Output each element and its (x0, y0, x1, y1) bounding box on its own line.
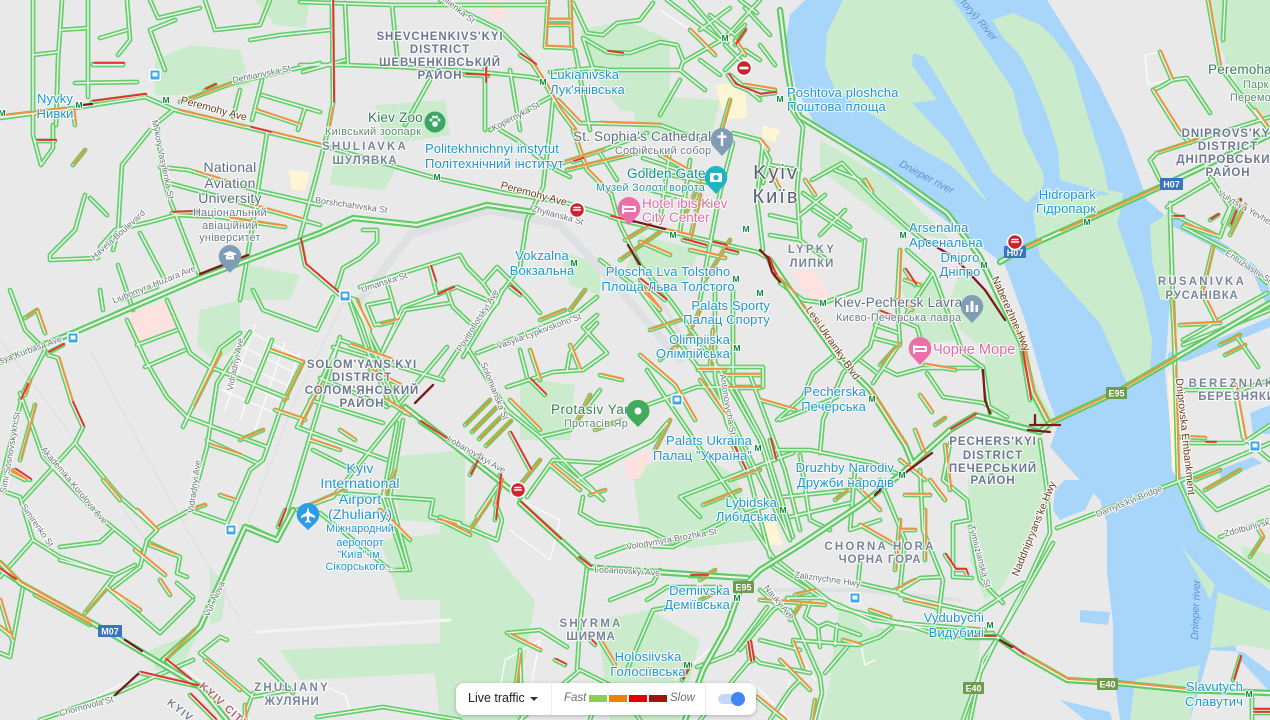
metro markers: M (1083, 217, 1091, 227)
points of interest (193, 62, 1270, 430)
road and river names: Peremohy Ave (179, 94, 248, 124)
label: aviation university Ukrainian: авіаційний (202, 220, 258, 232)
label: Arsenalna station: Арсенальна (909, 235, 983, 250)
metro markers: M (721, 33, 729, 43)
label: Arsenalna station: Arsenalna (909, 220, 968, 235)
label: Lypky: LYPKY (788, 244, 836, 256)
label: Peremoha park Ukrainian: Парк (1243, 79, 1269, 91)
label: National Aviation University: National (204, 159, 256, 175)
label: Poshtova ploshcha station: Poshtova ploshcha (787, 85, 899, 100)
label: Lybidska station: Lybidska (725, 495, 777, 510)
railway yards and airport runway (0, 210, 960, 632)
metro markers: M (980, 260, 988, 270)
label: Kyiv zoo Ukrainian: Київський зоопарк (325, 126, 421, 138)
label: Shevchenkivskyi district: ШЕВЧЕНКІВСЬКИЙ (379, 56, 501, 69)
label: Vokzalna station: Vokzalna (515, 248, 569, 263)
road and river names: Simirenko St (19, 502, 56, 549)
Fast label: Fast (564, 692, 586, 704)
shield: M07 (98, 625, 122, 637)
label: Ploshcha Lva Tolstoho station: Ploscha Lva Tolstoho (606, 264, 730, 279)
label: Demiivska station: Demiivska (669, 583, 730, 598)
label: Shyrma: ШИРМА (566, 631, 616, 643)
label: Rusanivka: РУСАНІВКА (1165, 290, 1239, 302)
icon: Protasiv Yar pin (627, 400, 649, 427)
metro markers: M (754, 443, 762, 453)
label: Palats Sporty station: Палац Спорту (683, 312, 770, 327)
label: Lukianivska station: Lukianivska (550, 67, 619, 82)
divider left (551, 683, 552, 715)
label: Zhuliany: ЖУЛЯНИ (263, 696, 320, 708)
metro markers: M (819, 298, 827, 308)
label: Dnipro station: Дніпро (940, 264, 980, 279)
metro markers: M (683, 660, 691, 670)
metro markers: M (733, 593, 741, 603)
label: Shuliavka: ШУЛЯВКА (332, 155, 398, 167)
label: Shevchenkivskyi district: SHEVCHENKIVS'KYI (376, 31, 504, 43)
metro markers: M (776, 94, 784, 104)
metro markers: M (742, 224, 750, 234)
label: Vokzalna station: Вокзальна (510, 263, 575, 278)
dropdown caret (530, 697, 538, 701)
metro markers: M (899, 230, 907, 240)
metro markers: M (1245, 689, 1253, 699)
road and river names: Mykoly Vasylenka St (150, 119, 176, 200)
road and river names: Dehtiarivska St (231, 63, 292, 85)
icon: road closed (736, 60, 752, 76)
metro markers: M (539, 77, 547, 87)
label: Golden Gate: Golden Gate (627, 166, 706, 181)
Slow label: Slow (670, 692, 695, 704)
metro markers: M (756, 288, 764, 298)
label: Olimpiiska station: Olimpiiska (669, 332, 730, 347)
shield: H07 on bridge (1004, 246, 1026, 258)
metro markers: M (986, 620, 994, 630)
label: National Aviation University: University (198, 190, 262, 206)
label: Pecherskyi district: PECHERS'KYI (949, 436, 1037, 448)
label: Zhuliany: ZHULIANY (254, 682, 330, 694)
label: Pecherskyi district: ПЕЧЕРСЬКИЙ (949, 462, 1037, 475)
label: Vydubychi station: Видубичі (929, 625, 984, 640)
icon: traffic incident Lobanovskyi (510, 482, 526, 498)
label: Holosiivska station: Holosiivska (615, 649, 681, 664)
label: airport Ukrainian name: Сікорського... (325, 561, 395, 573)
road and river names: Lobanovskyi Ave (594, 564, 660, 578)
road and river names: Vasylia Lypkivskoho St (495, 311, 583, 351)
label: Slavutych station: Славутич (1185, 694, 1243, 709)
shield: E40 east (1097, 678, 1118, 690)
metro markers: M (669, 230, 677, 240)
icon: St Sophia pin (711, 128, 733, 156)
label: aviation university Ukrainian: університет (199, 232, 261, 244)
metro markers: M (868, 394, 876, 404)
pink and yellow land-use areas (128, 0, 1178, 545)
label: Kyievo Pecherska Lavra Ukrainian: Києво-Печерська лавра (836, 312, 961, 324)
label: Solomianskyi district: DISTRICT (332, 372, 392, 384)
label: Dniprovskyi district: РАЙОН (1206, 166, 1250, 179)
road and river names: Liubomyra Huzara Ave (111, 263, 197, 305)
highway shields (98, 178, 1183, 694)
label: Pecherska station: Pecherska (804, 384, 866, 399)
label: Kyiv International Airport: Kyiv (346, 461, 374, 477)
icon: Airport pin (297, 503, 319, 530)
label: Dnipro station: Dnipro (941, 250, 979, 265)
label: Sofiiskyi sobor: Софійський собор (615, 145, 711, 157)
scale: dark red colour (649, 695, 667, 702)
label: Vydubychi station: Vydubychi (924, 610, 984, 625)
legend: live traffic control (456, 683, 756, 715)
label: Hidropark station: Hidropark (1039, 187, 1096, 202)
label: Rusanivka: RUSANIVKA (1158, 276, 1246, 288)
label: Lypky: ЛИПКИ (790, 258, 834, 270)
shield: H07 (1160, 178, 1183, 190)
road and river names: Dnieper river (897, 158, 956, 197)
label: Slavutych station: Slavutych (1186, 679, 1243, 694)
shield: E95 centre: E95 (735, 582, 752, 592)
label: Ploshcha Lva Tolstoho station: Площа Льва Толстого (601, 279, 735, 294)
label: Shuliavka: SHULIAVKA (322, 141, 408, 153)
shield: E95 east: E95 (1108, 388, 1125, 398)
road and river names: Zaliznychne Hwy (794, 569, 862, 589)
road and river names: Tymiuzianska St (967, 524, 993, 589)
label: Shyrma: SHYRMA (559, 618, 623, 630)
road and river names: Dniprovska Embankment (1173, 378, 1197, 496)
label: Holosiivska station: Голосіївська (610, 664, 686, 679)
scale: fast colour (589, 695, 607, 702)
label: Druzhby Narodiv station: Дружби народів (797, 475, 894, 490)
road and river names: Vul. Nova (202, 579, 227, 618)
dark red stopped traffic segments (82, 104, 1060, 695)
label: Olimpiiska station: Олімпійська (656, 346, 731, 361)
shield: E40 west (963, 682, 984, 694)
label: Nyvky station: Нивки (36, 106, 74, 121)
road and river names: Nauky Ave (762, 583, 797, 621)
label: Protasiv Yar: Protasiv Yar (551, 402, 629, 417)
label: Kyiv city name: Kyiv (753, 162, 799, 184)
label: Zoloti Vorota museum: Музей Золоті ворота (596, 182, 705, 194)
label: Protasiv Yar Ukrainian: Протасів Яр (564, 418, 628, 430)
road and river names: Vidradnyi Ave (185, 459, 203, 514)
scale: orange colour (609, 695, 627, 702)
shield: M07: M07 (101, 626, 119, 636)
road and river names: Akademika Korolova Ave (39, 444, 110, 526)
icon: traffic incident Peremohy (570, 202, 584, 218)
label: airport Ukrainian name: аеропорт (336, 537, 384, 549)
scale: red colour (629, 695, 647, 702)
label: airport Ukrainian name: "Київ" ім. (337, 549, 383, 561)
road and river names: Havela Boulevard (89, 208, 147, 262)
label: Poshtova ploshcha station: Поштова площа (787, 99, 887, 114)
icon: Hotel ibis pin (618, 197, 640, 225)
icon: traffic incident H07 (1008, 234, 1022, 250)
label: Nyvky station: Nyvky (37, 91, 73, 106)
label: Palats Ukraina station: Палац "Україна" (653, 448, 752, 463)
road and river names: Povitroflotskyi Ave (454, 287, 501, 353)
label: Chorne More hotel: Чорне Море (933, 342, 1015, 358)
label: Politekhnichnyi instytut station: Політехнічний інститут (425, 156, 564, 171)
road and river names: Zhylianska St (531, 203, 585, 227)
road and river names: Kopernyka St (490, 99, 542, 133)
label: Hotel ibis: Hotel ibis Kiev (642, 196, 728, 211)
label: Dniprovskyi district: DISTRICT (1198, 141, 1258, 153)
road and river names: Chornovola St (58, 694, 115, 718)
metro markers: M (433, 172, 441, 182)
label: Kiev Pechersk Lavra: Kiev-Pechersk Lavra (834, 295, 963, 310)
road and river names: Naddnipryans'ke Hwy (1010, 479, 1059, 578)
road and river names: Naberezhne Hwy (989, 275, 1033, 354)
label: Peremoha park: Peremoha (1208, 62, 1270, 77)
shield: H07: H07 (1163, 180, 1180, 190)
road and river names: Vidradnyi Ave (225, 337, 246, 392)
metro markers: M (570, 258, 578, 268)
road and river names: Umanska St (360, 270, 409, 294)
shield: E40 east: E40 (1099, 680, 1116, 690)
label: Pecherskyi district: DISTRICT (963, 450, 1023, 462)
water: Dnieper river (786, 0, 1270, 720)
label: Kyiv International Airport: International (320, 476, 400, 492)
icon: University pin (219, 245, 241, 273)
shield: E95 centre (733, 581, 754, 593)
label: Shevchenkivskyi district: РАЙОН (418, 69, 462, 82)
road and river names: Borshchahivska St (315, 195, 389, 215)
label: Chorna Hora: ЧОРНА ГОРА (839, 554, 921, 566)
label: Kiev Zoo: Kiev Zoo (368, 110, 423, 125)
shield: E95 east (1106, 387, 1127, 399)
road and river names: Darnyts'kyi Bridge (1094, 483, 1164, 519)
label: National Aviation University: Aviation (204, 175, 256, 191)
metro markers: M (75, 100, 83, 110)
label: Kyiv International Airport: Airport (339, 492, 381, 508)
label: Lybidska station: Либідська (716, 509, 778, 524)
toggle track (718, 694, 744, 704)
icon: Lavra pin (961, 295, 983, 323)
legend title: Live traffic (468, 691, 525, 705)
metro markers: M (733, 343, 741, 353)
label: Solomianskyi district: СОЛОМ'ЯНСЬКИЙ (305, 384, 419, 397)
label: Druzhby Narodiv station: Druzhby Narodiv (796, 460, 894, 475)
road and river names: Antonovycha St (718, 373, 738, 436)
label: Demiivska station: Деміївська (664, 597, 731, 612)
road and river names: Peremohy Ave (499, 179, 568, 209)
label: Pecherskyi district: РАЙОН (971, 474, 1015, 487)
road and river names: Volodymyra Brozhka St (626, 526, 718, 552)
icon: Golden Gate pin (705, 166, 727, 194)
label: Solomianskyi district: SOLOM'YANS'KYI (307, 359, 417, 371)
icon: Chorne More pin (909, 337, 931, 365)
canals (1172, 0, 1270, 357)
label: Palats Sporty station: Palats Sporty (691, 298, 770, 313)
metro markers: M (162, 95, 170, 105)
road and river names: Lesi Ukrainky Blvd (803, 304, 862, 382)
shield: H07 on bridge: H07 (1007, 248, 1023, 258)
label: Politekhnichnyi instytut station: Politekhnichnyi instytut (425, 141, 559, 156)
metro markers: M (898, 470, 906, 480)
metro markers: M (779, 505, 787, 515)
road and river names: Solomianska St (479, 361, 511, 422)
label: airport Ukrainian name: Міжнародний (326, 523, 394, 535)
label: Shevchenkivskyi district: DISTRICT (410, 44, 470, 56)
label: Kyiv International Airport: (Zhuliany) (328, 507, 392, 523)
road and river names: Dnieper river (1189, 579, 1203, 640)
label: Chorna Hora: CHORNA HORA (824, 541, 936, 553)
icons: transit stops (67, 69, 1261, 604)
divider right (705, 683, 706, 715)
metro markers: M (732, 274, 740, 284)
label: Hotel ibis: City Center (642, 210, 710, 225)
shield: E40 west: E40 (965, 684, 982, 694)
label: Hidropark station: Гідропарк (1036, 201, 1096, 216)
label: St Sophia's Cathedral: St. Sophia's Cathedral (573, 129, 711, 144)
label: aviation university Ukrainian: Національний (193, 207, 267, 219)
road and river names: Lobanovskyi Ave (445, 434, 508, 475)
icon: Kiev Zoo pin (424, 112, 446, 132)
toggle knob (731, 692, 745, 706)
label: Pecherska station: Печерська (801, 399, 867, 414)
label: Kyiv city name: Київ (752, 186, 800, 208)
label: Solomianskyi district: РАЙОН (340, 397, 384, 410)
label: Lukianivska station: Лук'янівська (550, 82, 626, 97)
label: Palats Ukraina station: Palats Ukraina (666, 433, 752, 448)
